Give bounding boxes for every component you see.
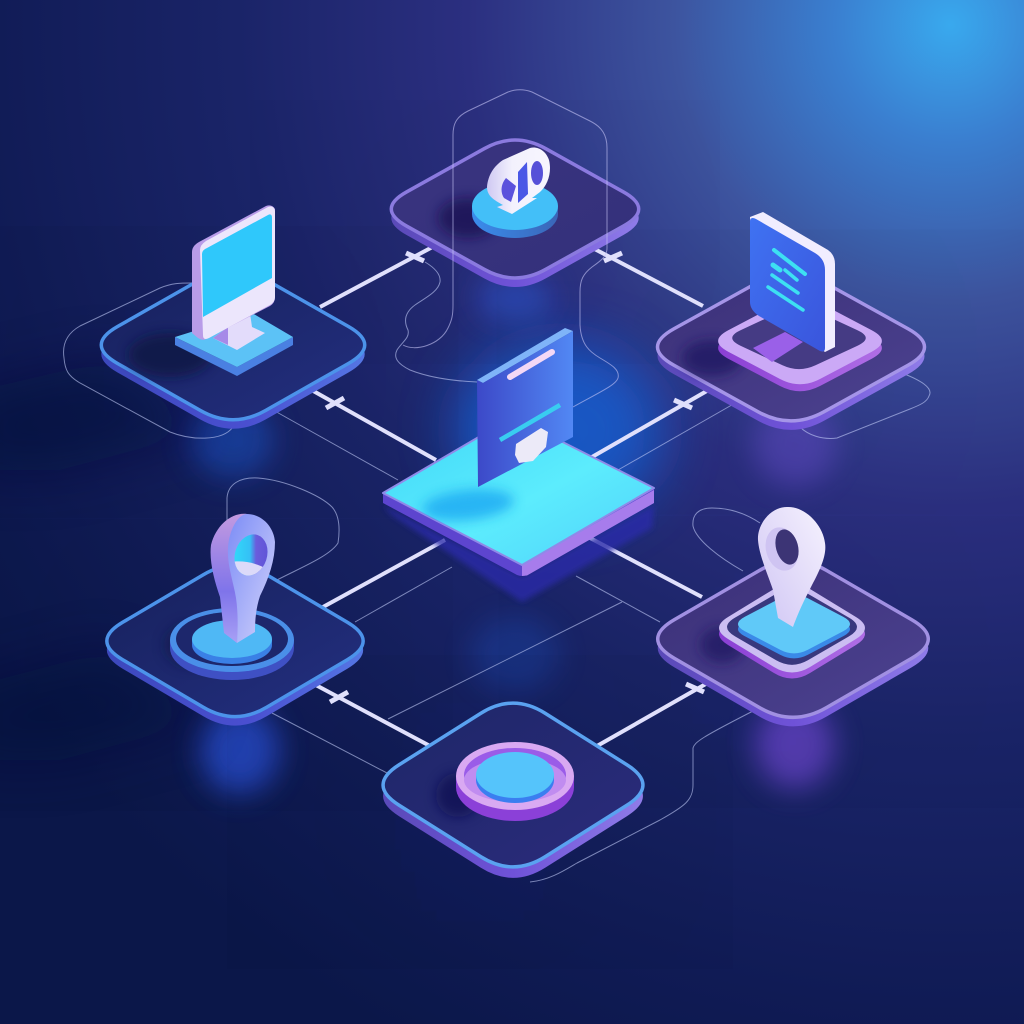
ring base [718, 298, 882, 391]
panel: left tile [101, 270, 365, 429]
central tile [383, 417, 654, 602]
icon: monitor [175, 205, 293, 376]
connector lines [308, 243, 718, 746]
icon: lower-left location pin [164, 514, 294, 680]
cast shadows of tiles [0, 166, 894, 890]
badge [515, 428, 548, 463]
icon: lower-right location pin [719, 507, 865, 678]
cyan plate [738, 600, 850, 658]
icon: top disk with emblem [472, 148, 558, 238]
concentric rings [164, 608, 294, 680]
monitor screen [202, 214, 272, 317]
panel: lower-left tile [107, 565, 363, 726]
pin body [211, 514, 247, 643]
emblem glyph [487, 148, 550, 214]
document panel [477, 328, 573, 487]
panel: top tile [391, 140, 639, 287]
icon: bottom disc [456, 742, 574, 821]
arch circuit line [403, 90, 618, 407]
pin body [758, 507, 825, 627]
thin circuit lines [64, 262, 930, 882]
panel: lower-right tile [658, 561, 928, 726]
text lines glyph [768, 250, 805, 310]
cyan divider [500, 405, 560, 440]
glows and reflections [190, 274, 837, 794]
document card [750, 212, 835, 352]
pin hole [234, 534, 268, 576]
monitor base plate [175, 337, 293, 376]
icon: document on ring [718, 212, 882, 391]
central tile with document [383, 328, 654, 602]
panel: bottom tile [383, 703, 643, 878]
square ring base [719, 584, 865, 678]
highlight bar [510, 352, 552, 377]
panel: right tile [658, 273, 924, 430]
pin hole [761, 524, 803, 574]
